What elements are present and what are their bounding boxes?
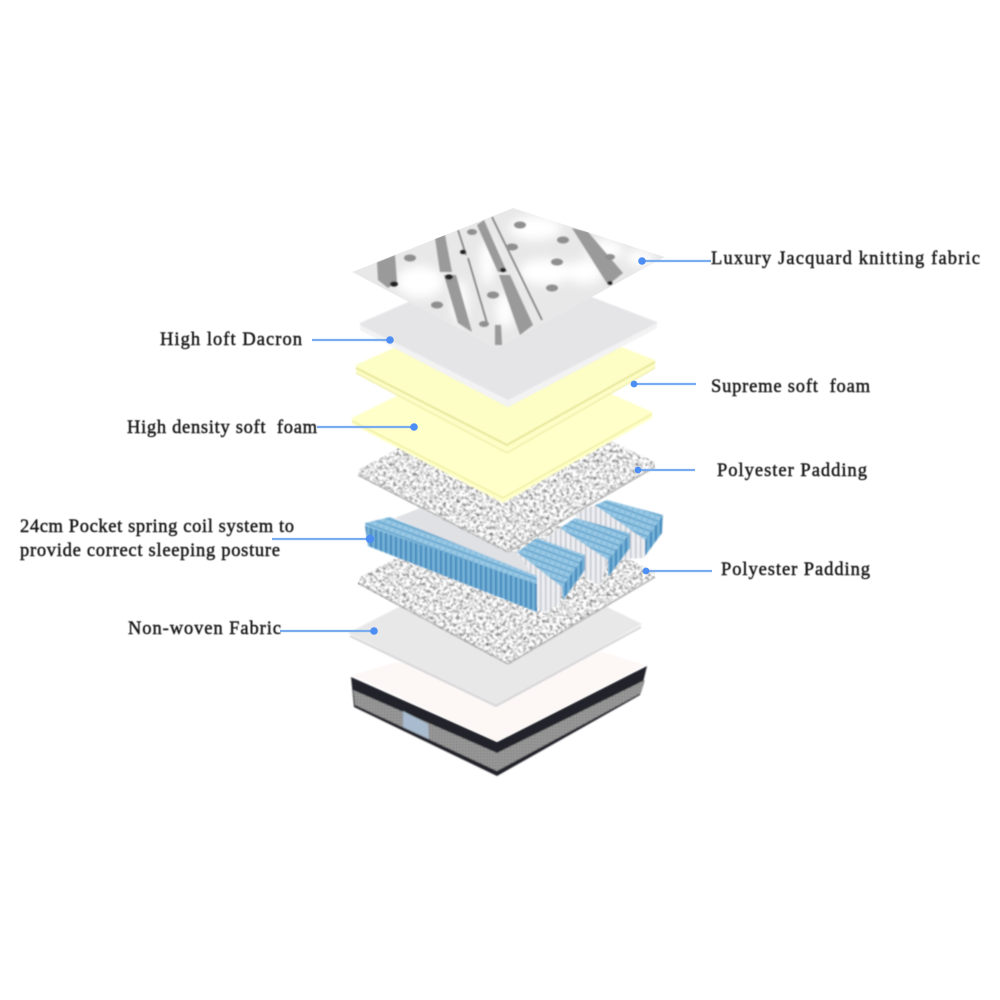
leader: Pocket spring [272, 535, 374, 543]
layer: non-woven fabric [348, 555, 642, 707]
label: High loft Dacron: High loft Dacron [160, 330, 302, 350]
mattress label [403, 711, 429, 739]
fabric stripes [377, 220, 623, 345]
spring row 4 [575, 500, 663, 560]
leader: upper Polyester Padding [635, 467, 695, 473]
label: High density soft foam: High density soft foam [127, 418, 318, 438]
label: Pocket spring coil system [20, 517, 294, 561]
fabric pillows [396, 216, 654, 328]
label: Luxury Jacquard knitting fabric: Luxury Jacquard knitting fabric [711, 249, 980, 269]
spring row 3 [543, 518, 630, 585]
leader: Non-woven Fabric [280, 627, 378, 635]
spring row 2 [500, 538, 585, 613]
layer: luxury Jacquard knitting fabric [352, 208, 665, 349]
pocket spring coil system [365, 500, 663, 613]
label: Supreme soft foam: Supreme soft foam [711, 377, 871, 397]
label: lower Polyester Padding: Polyester Padding [721, 560, 870, 580]
label: Non-woven Fabric: Non-woven Fabric [128, 619, 281, 639]
leader: High loft Dacron [312, 336, 394, 344]
layer: high density soft foam [352, 345, 652, 503]
layer: upper polyester padding [358, 390, 655, 553]
leader: High density soft foam [317, 423, 418, 431]
spring row 1 [365, 517, 537, 612]
spring white back band [395, 508, 537, 582]
fabric tufts [404, 222, 615, 327]
mattress [351, 652, 647, 776]
layer: supreme soft foam [356, 300, 655, 453]
layer: lower polyester padding [358, 500, 655, 665]
layer: high loft Dacron [360, 262, 657, 407]
label: upper Polyester Padding: Polyester Padding [717, 461, 867, 481]
leader: Supreme soft foam [631, 381, 696, 387]
leader: Luxury Jacquard [638, 257, 711, 265]
leader: lower Polyester Padding [643, 568, 712, 574]
label: Pocket spring coil system: 24cm Pocket spring coil system to [20, 517, 294, 537]
label: Pocket spring coil system: provide correct sleeping posture [20, 541, 280, 561]
